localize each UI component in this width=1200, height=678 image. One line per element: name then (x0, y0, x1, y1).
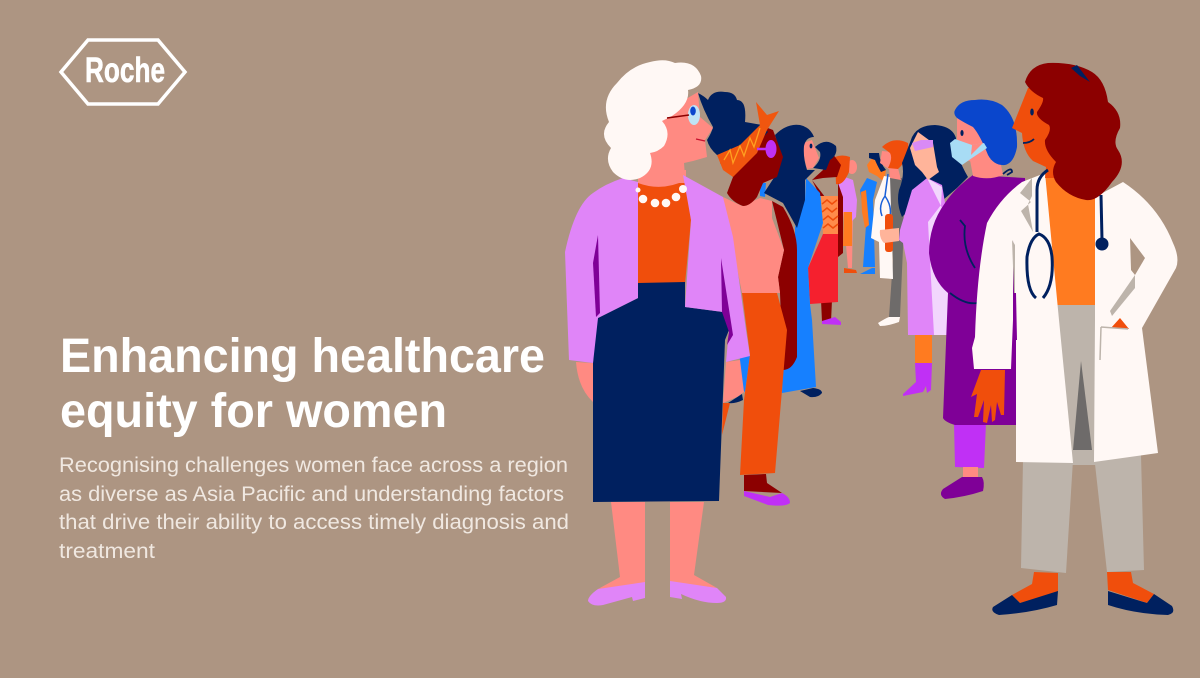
figure: far woman with orange hair (835, 156, 857, 273)
figure: woman with red skirt and zigzag top (808, 142, 843, 325)
pearl necklace (636, 185, 687, 207)
title: Enhancing healthcare (60, 330, 545, 383)
figure: small doctor with test tube (871, 140, 908, 326)
figure: woman in blue dress with long navy hair (737, 125, 823, 397)
figure: woman with orange headband and purple glasses (698, 92, 797, 506)
subtitle text block: Recognising challenges women face across a region (59, 453, 568, 477)
figure: doctor in white coat with stethoscope (971, 63, 1177, 615)
subtitle text block: treatment (59, 539, 155, 563)
title (60, 330, 545, 438)
cardigan (565, 175, 750, 363)
subtitle text block: as diverse as Asia Pacific and understanding factors (59, 482, 564, 506)
subtitle text block: that drive their ability to access timely diagnosis and (59, 510, 569, 534)
figure: older woman with white hair and pearls (565, 60, 750, 605)
icon: stethoscope (1027, 170, 1108, 298)
figure: woman in blue trousers (860, 153, 886, 274)
figure: woman in lilac coat with goggles (898, 125, 968, 396)
white hair (604, 60, 701, 180)
logo: Roche hexagon (61, 40, 185, 104)
logo: Roche hexagon: Roche (85, 51, 165, 90)
figure: woman in purple with blue hair and mask (929, 100, 1030, 499)
title: equity for women (60, 385, 447, 438)
subtitle text block (59, 453, 569, 563)
